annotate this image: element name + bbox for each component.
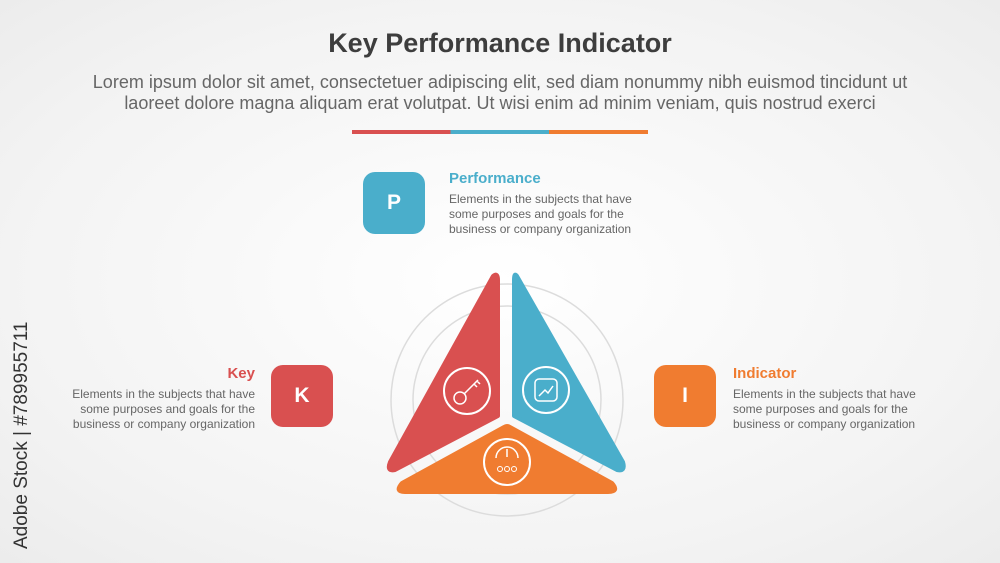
box I: I [682, 384, 688, 407]
text: Key [72, 365, 255, 431]
subtitle: Lorem ipsum dolor sit amet, consectetuer adipiscing elit, sed diam nonummy nibh euismod tincidunt ut laoreet dolore magna aliquam erat volutpat. Ut wisi enim ad minim veniam, quis nostrud exerci [93, 72, 907, 113]
segment: red [389, 275, 498, 470]
watermark side text: Adobe Stock | #789955711 [11, 322, 32, 549]
text: Key: Elements in the subjects that have some purposes and goals for the business or company organization [72, 387, 255, 431]
box P [363, 172, 425, 234]
box P: P [387, 191, 401, 214]
text: Indicator: Elements in the subjects that have some purposes and goals for the business or company organization [733, 387, 916, 431]
box I [654, 365, 716, 427]
text: Performance: Performance [449, 170, 541, 187]
title: Key Performance Indicator [328, 28, 672, 58]
divider bar [352, 130, 648, 134]
segment: blue [514, 275, 624, 470]
segment: orange [399, 426, 615, 492]
box K: K [294, 384, 310, 407]
text: Performance: Elements in the subjects that have some purposes and goals for the business or company organization [449, 192, 632, 236]
text: Key: Key [227, 365, 255, 382]
text: Indicator [733, 365, 916, 431]
text: Performance [449, 170, 632, 236]
box K [271, 365, 333, 427]
text: Indicator: Indicator [733, 365, 796, 382]
